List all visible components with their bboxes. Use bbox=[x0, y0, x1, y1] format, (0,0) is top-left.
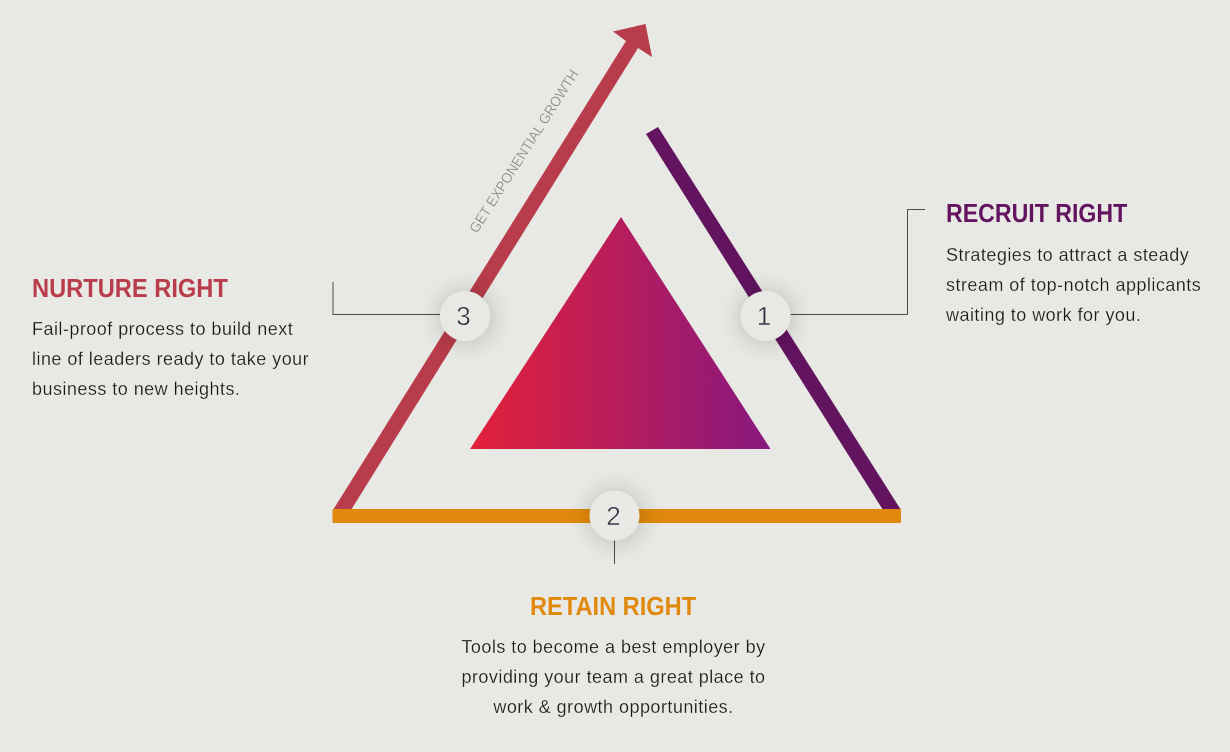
leader line: recruit bbox=[790, 210, 925, 314]
orange base: retain bbox=[332, 509, 901, 523]
badge 2: 2 bbox=[606, 501, 621, 531]
arrow label: GET EXPONENTIAL GROWTH bbox=[467, 67, 582, 236]
text: retain: work & growth opportunities. bbox=[493, 697, 734, 717]
badge 3: 3 bbox=[456, 301, 471, 331]
text: nurture bbox=[32, 319, 309, 399]
text: recruit: stream of top-notch applicants bbox=[946, 275, 1201, 295]
heading: retain: RETAIN RIGHT bbox=[530, 591, 696, 621]
text: recruit: waiting to work for you. bbox=[946, 305, 1141, 325]
badge 3 bbox=[437, 288, 495, 346]
text: retain: providing your team a great place to bbox=[461, 667, 766, 687]
text: retain bbox=[461, 637, 766, 717]
badge 1 bbox=[738, 288, 796, 346]
red growth arrow: nurture bbox=[333, 24, 652, 510]
text: nurture: business to new heights. bbox=[32, 379, 240, 399]
text: nurture: Fail-proof process to build next bbox=[32, 319, 293, 339]
leader line: nurture bbox=[333, 282, 441, 314]
section: retain right bbox=[461, 591, 766, 717]
heading: nurture: NURTURE RIGHT bbox=[32, 273, 228, 303]
text: recruit: Strategies to attract a steady bbox=[946, 245, 1189, 265]
text: nurture: line of leaders ready to take your bbox=[32, 349, 309, 369]
badge 2 bbox=[586, 488, 644, 546]
section: nurture right bbox=[32, 273, 309, 399]
section: recruit right bbox=[946, 198, 1201, 325]
text: retain: Tools to become a best employer by bbox=[461, 637, 766, 657]
text: recruit bbox=[946, 245, 1201, 325]
badge 1: 1 bbox=[757, 301, 771, 331]
centre gradient triangle bbox=[470, 217, 770, 449]
leader line: retain bbox=[614, 540, 616, 564]
heading: recruit: RECRUIT RIGHT bbox=[946, 198, 1127, 228]
purple side: recruit bbox=[646, 127, 901, 510]
